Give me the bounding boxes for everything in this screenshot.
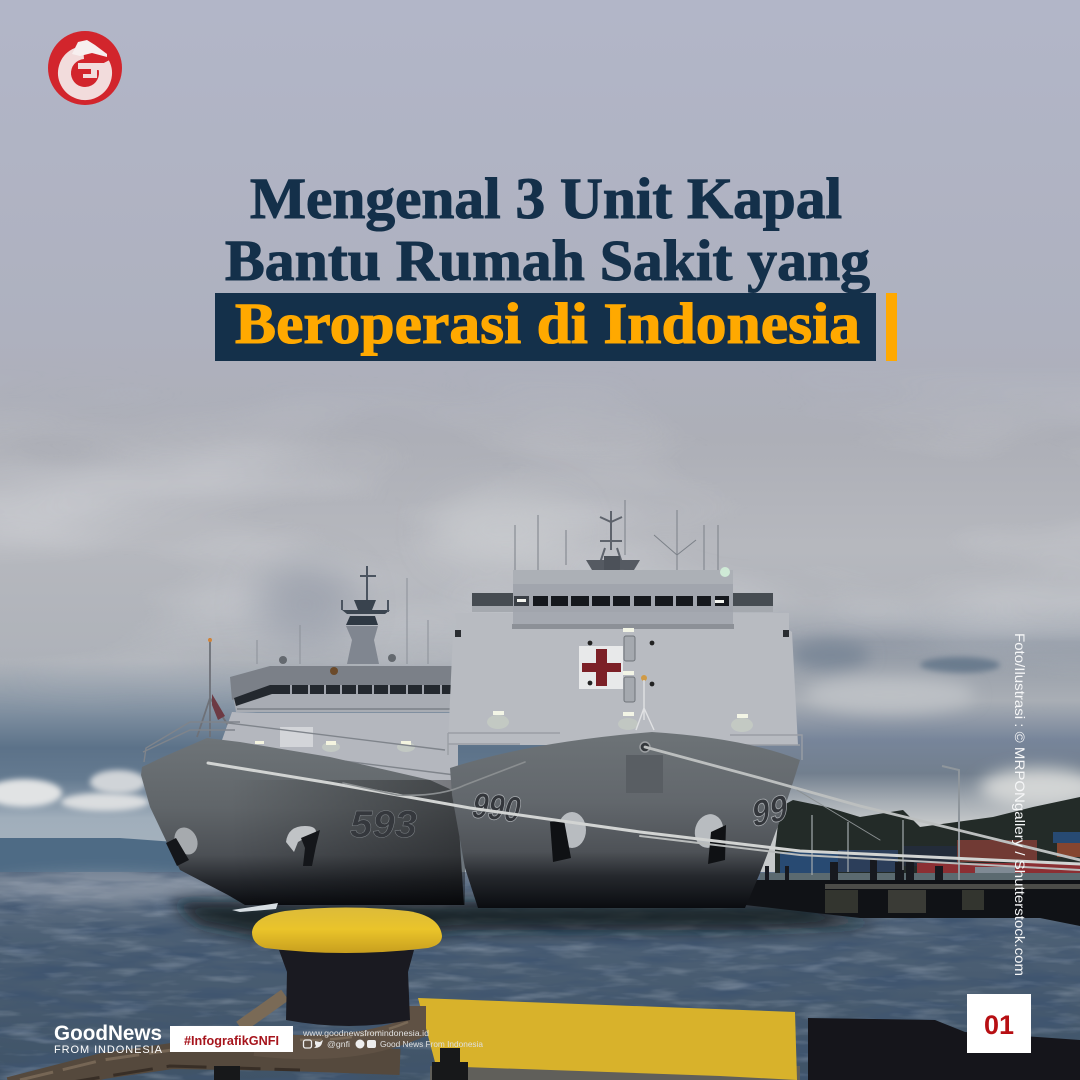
deck rail: [143, 722, 455, 775]
deck lights: [487, 628, 753, 732]
mast: [586, 511, 640, 579]
website and social handles: Good News From Indonesia: [380, 1039, 483, 1049]
crest: [330, 667, 338, 675]
foreground mooring rope: [10, 995, 414, 1080]
fairlead: [640, 742, 650, 752]
title highlighted line: Beroperasi di Indonesia: [235, 291, 860, 356]
red cross sign: [579, 646, 623, 689]
upper deck: [513, 570, 733, 629]
deck lights: [255, 741, 415, 752]
superstructure: [222, 712, 458, 790]
green mast light: [720, 567, 730, 577]
page number: [967, 994, 1031, 1053]
yellow quay edge: [418, 998, 797, 1080]
title highlight bar: [215, 293, 876, 361]
hashtag label: #InfografikGNFI: [184, 1033, 279, 1048]
hull number 990 port: 990: [468, 785, 526, 830]
right hospital ship 990: [448, 500, 802, 908]
background: harbour trees, containers, pier: [745, 766, 1080, 926]
title line one: Mengenal 3 Unit Kapal: [250, 166, 842, 231]
page number: 01: [984, 1010, 1014, 1040]
mooring ropes: [208, 747, 1080, 870]
anchor pockets: [286, 826, 316, 852]
website and social handles: [302, 1028, 483, 1049]
hashtag label: [170, 1026, 293, 1052]
hull number 990 starboard: 99: [752, 786, 788, 835]
website and social handles: @gnfi: [327, 1039, 350, 1049]
mast and radar: [257, 566, 428, 664]
dark cleats on the quay: [214, 1048, 468, 1080]
brand wordmark: GoodNews: [54, 1022, 162, 1045]
hull: [141, 738, 464, 905]
title: [225, 166, 870, 293]
hull: [450, 732, 800, 908]
photo credit: Foto/Ilustrasi : © MRPONgallery / Shutterstock.com: [1012, 633, 1028, 976]
hull hatches: [624, 636, 635, 702]
foreground black dock slab: [808, 1018, 1080, 1080]
brand wordmark: FROM INDONESIA: [54, 1044, 163, 1056]
title line two: Bantu Rumah Sakit yang: [225, 228, 870, 293]
deck rail: [448, 733, 802, 760]
antennas: [515, 500, 718, 570]
left flag mast: [197, 638, 238, 740]
concrete ground at the quay edge: [430, 1066, 800, 1080]
street lamp: [942, 766, 959, 880]
main white block: [448, 613, 798, 745]
title highlight accent: [886, 293, 897, 361]
bow panel: [626, 755, 663, 793]
anchor pockets: [558, 812, 586, 848]
website and social handles: www.goodnewsfromindonesia.id: [302, 1028, 429, 1038]
left ship 593: [141, 566, 465, 905]
hull number 593: 593: [350, 804, 417, 846]
brand wordmark: [54, 1022, 163, 1056]
side wings: [472, 593, 773, 612]
portholes: [588, 641, 592, 645]
wake at the bow: [232, 903, 278, 912]
small tripod mast on deck: [636, 680, 654, 730]
distant hills on the left horizon: [0, 838, 200, 874]
deck gun mount: [280, 727, 313, 747]
water: [0, 872, 1080, 1080]
logo badge: [48, 31, 122, 105]
bridge windows: [514, 596, 729, 606]
yellow bollard: [252, 908, 442, 1026]
